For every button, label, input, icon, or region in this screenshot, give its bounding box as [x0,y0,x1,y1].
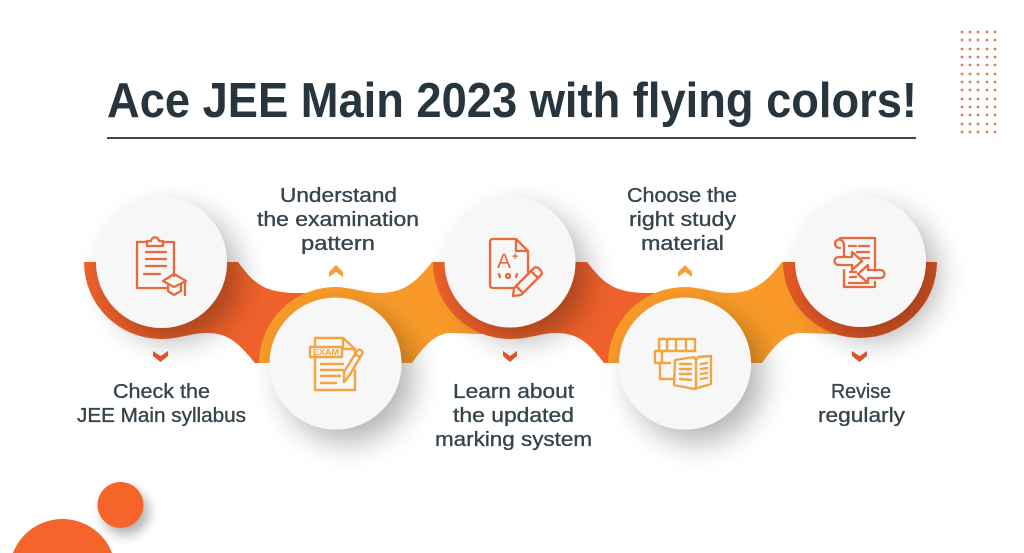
label: step 5 [818,381,905,427]
icon: graded paper A+ with pencil: + [512,251,518,263]
label: step 4: Choose the [627,185,737,207]
label: step 1 [77,381,246,427]
label: step 1: JEE Main syllabus [77,405,246,427]
step 4 circle [619,298,751,430]
icon: exam paper and pencil [310,338,362,390]
chevron: step 3 [503,351,517,362]
label: step 2 [257,185,419,255]
chevron: step 2 [329,265,343,277]
ribbon segment: step 3 [433,262,690,363]
decorative small circle [98,482,144,528]
icon: exam paper and pencil: EXAM [313,348,339,357]
step 1 circle [96,197,227,328]
label: step 3: marking system [435,429,592,451]
label: step 4: material [641,233,724,255]
title underline [107,137,916,139]
icon: clipboard with graduation cap [137,237,186,295]
label: step 3: the updated [453,405,574,427]
step 3 circle [444,196,576,328]
dot grid decoration [961,31,996,133]
label: step 3 [435,381,592,451]
label: step 3: Learn about [453,381,574,403]
icon: revision notes with arrows [834,238,884,287]
icon: stack of books with open book [655,339,711,389]
ribbon segment: step 4 [608,262,860,363]
ribbon connecting the steps [84,262,937,363]
icon: graded paper A+ with pencil: A [497,250,511,273]
label: step 2: Understand [280,185,397,207]
chevron: step 1 [153,351,168,362]
ribbon segment: step 2 [259,262,510,363]
decorative large circle, cut off by the bottom edge [13,519,112,553]
label: step 5: regularly [818,405,905,427]
ribbon segment: step 1 [84,262,340,363]
label: step 4: right study [629,209,736,231]
chevron: step 5 [852,351,867,362]
label: step 1: Check the [113,381,210,403]
label: step 4 [627,185,737,255]
label: step 2: pattern [301,233,375,255]
title: Ace JEE Main 2023 with flying colors! [107,73,917,128]
step 5 circle [795,196,926,327]
label: step 2: the examination [257,209,419,231]
chevron: step 4 [678,265,692,277]
icon: graded paper A+ with pencil [490,239,542,296]
step 2 circle [270,298,402,430]
label: step 5: Revise [831,381,891,403]
ribbon segment: step 5 [783,262,937,338]
